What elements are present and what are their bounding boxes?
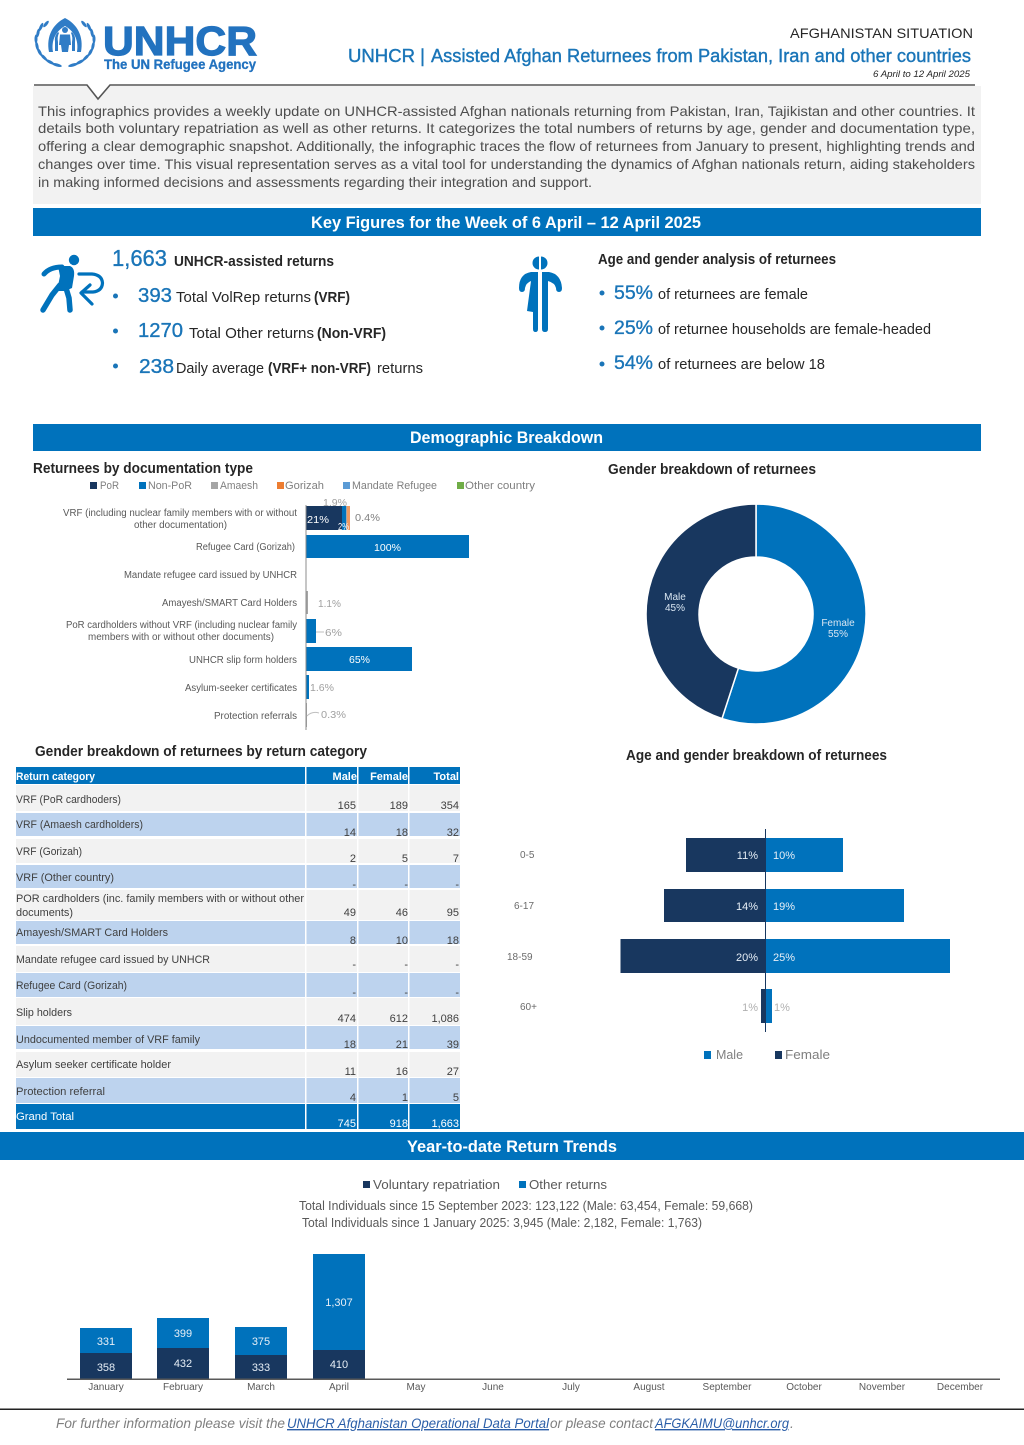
chart category labels: Amayesh/SMART Card Holders bbox=[162, 598, 297, 609]
stat: below 18 bbox=[600, 352, 825, 374]
table values: male: 8 bbox=[350, 935, 356, 947]
header: date range: 6 April to 12 April 2025 bbox=[873, 69, 971, 80]
month labels bbox=[88, 1382, 984, 1393]
table row labels: Protection referral bbox=[16, 1086, 105, 1098]
stat: female share bbox=[600, 282, 808, 304]
table row labels: documents) bbox=[16, 907, 73, 919]
table values: female: 918 bbox=[390, 1118, 408, 1130]
donut labels: Female bbox=[821, 618, 855, 629]
intro text: details both voluntary repatriation as well as other returns. It categorizes the total numbers of returns by age, gender and documentation type, bbox=[38, 120, 975, 136]
month labels: May bbox=[407, 1382, 425, 1393]
chart legend: Mandate Refugee bbox=[352, 480, 437, 492]
table row labels: VRF (Gorizah) bbox=[16, 846, 82, 858]
chart category labels: Asylum-seeker certificates bbox=[185, 683, 297, 694]
table header row bbox=[16, 771, 459, 783]
table values: total: 39 bbox=[447, 1039, 459, 1051]
month labels: October bbox=[786, 1382, 822, 1393]
table values: male: - bbox=[352, 959, 356, 971]
stat: female-headed households: of returnee households are female-headed bbox=[658, 322, 931, 338]
logo: UNHCR bbox=[34, 18, 257, 72]
heading: age and gender analysis: Age and gender analysis of returnees bbox=[598, 252, 836, 268]
section heading: year-to-date trends: Year-to-date Return Trends bbox=[407, 1137, 617, 1156]
table row labels: Refugee Card (Gorizah) bbox=[16, 980, 127, 992]
table values: male: 11 bbox=[345, 1066, 356, 1078]
table values: total: - bbox=[455, 959, 459, 971]
key figure: other returns: (Non-VRF) bbox=[317, 326, 386, 342]
stat: female-headed households: 25% bbox=[614, 317, 653, 339]
chart data labels: 1.6% bbox=[310, 682, 334, 694]
donut segment: female bbox=[722, 504, 866, 724]
table values: female bbox=[390, 800, 408, 1130]
chart category labels: members with or without other documents) bbox=[88, 632, 274, 643]
table values: male: 474 bbox=[338, 1013, 356, 1025]
chart category labels: Mandate refugee card issued by UNHCR bbox=[124, 570, 297, 581]
intro text: changes over time. This visual representation serves as a vital tool for understanding the dynamics of Afghan nationals return, aiding stakeholders bbox=[38, 156, 975, 172]
table values: female: - bbox=[404, 959, 408, 971]
table values: total: 1,086 bbox=[431, 1013, 459, 1025]
header: title: UNHCR | bbox=[348, 45, 425, 66]
icon: man and woman bbox=[519, 256, 562, 332]
pyramid age labels: 0-5 bbox=[520, 850, 535, 861]
table values: female: 16 bbox=[396, 1066, 408, 1078]
section heading: demographic breakdown bbox=[33, 424, 981, 451]
chart data labels bbox=[307, 497, 401, 721]
table values: total: 27 bbox=[447, 1066, 459, 1078]
pyramid heading: Age and gender breakdown of returnees bbox=[626, 748, 887, 764]
bar values: 399 bbox=[174, 1328, 192, 1340]
chart category labels bbox=[63, 508, 297, 722]
intro text bbox=[38, 103, 975, 190]
table values: male: 49 bbox=[344, 907, 356, 919]
table values: male: 745 bbox=[338, 1118, 356, 1130]
stat: female-headed households bbox=[600, 317, 931, 339]
table row labels: Slip holders bbox=[16, 1007, 72, 1019]
table values: female: 612 bbox=[390, 1013, 408, 1025]
trends totals text bbox=[299, 1199, 753, 1230]
bar values: 1,307 bbox=[325, 1297, 353, 1309]
pyramid data labels: 11% bbox=[737, 850, 758, 862]
chart legend: PoR bbox=[100, 480, 119, 492]
month labels: January bbox=[88, 1382, 124, 1393]
table values: total: - bbox=[455, 987, 459, 999]
table values: male: - bbox=[352, 987, 356, 999]
chart category labels: PoR cardholders without VRF (including nuclear family bbox=[66, 620, 297, 631]
table values: female: 1 bbox=[402, 1092, 408, 1104]
key figure: daily average: 238 bbox=[139, 355, 174, 378]
table header row: Total bbox=[434, 771, 459, 783]
intro text: This infographics provides a weekly update on UNHCR-assisted Afghan nationals returning from Pakistan, Iran, Tajikistan and other countries. It bbox=[38, 103, 975, 119]
key figure: VolRep: 393 bbox=[138, 284, 172, 307]
footer bbox=[56, 1415, 794, 1431]
pyramid female bars bbox=[620, 838, 766, 1023]
table row labels: Undocumented member of VRF family bbox=[16, 1034, 200, 1046]
table header row: Return category bbox=[16, 771, 96, 783]
key figure: other returns: Total Other returns bbox=[189, 326, 314, 342]
table values: total: 5 bbox=[453, 1092, 459, 1104]
month labels: March bbox=[247, 1382, 275, 1393]
bars: voluntary repatriation bbox=[80, 1348, 365, 1379]
table row labels: VRF (PoR cardhoders) bbox=[16, 794, 121, 806]
table values: female: 5 bbox=[402, 853, 408, 865]
table values: total: 95 bbox=[447, 907, 459, 919]
table backgrounds bbox=[16, 767, 460, 1129]
footer: For further information please visit the bbox=[56, 1415, 285, 1431]
pyramid data labels: 20% bbox=[736, 952, 758, 964]
table values: total bbox=[431, 800, 459, 1130]
chart heading: Returnees by documentation type bbox=[33, 461, 253, 477]
donut labels: 55% bbox=[828, 629, 848, 640]
pyramid age labels: 60+ bbox=[520, 1002, 537, 1013]
table row labels: POR cardholders (inc. family members with or without other bbox=[16, 893, 304, 905]
trends legend: Other returns bbox=[529, 1177, 607, 1192]
table values: male bbox=[338, 800, 356, 1130]
key figure: VolRep: (VRF) bbox=[314, 290, 350, 306]
chart data labels: 2% bbox=[338, 521, 349, 533]
table values: total: 1,663 bbox=[431, 1118, 459, 1130]
month labels: June bbox=[482, 1382, 504, 1393]
pyramid legend: Male bbox=[716, 1047, 743, 1062]
table values: male: 2 bbox=[350, 853, 356, 865]
bar values: 410 bbox=[330, 1359, 348, 1371]
pyramid legend: Female bbox=[785, 1047, 830, 1062]
stat: female share: of returnees are female bbox=[658, 287, 808, 303]
month labels: April bbox=[329, 1382, 349, 1393]
pyramid data labels: 19% bbox=[773, 901, 795, 913]
table values: total: 32 bbox=[447, 827, 459, 839]
key figure: VolRep bbox=[113, 284, 350, 307]
pyramid male bars bbox=[766, 838, 950, 1023]
table row labels bbox=[16, 794, 304, 1123]
key figure: daily average bbox=[113, 355, 423, 378]
key figure: daily average: Daily average bbox=[176, 361, 264, 377]
stat: female share: 55% bbox=[614, 282, 653, 304]
table row labels: Grand Total bbox=[16, 1111, 74, 1123]
trends legend bbox=[363, 1177, 607, 1192]
donut labels: 45% bbox=[665, 603, 685, 614]
table row labels: VRF (Other country) bbox=[16, 872, 114, 884]
table row labels: VRF (Amaesh cardholders) bbox=[16, 819, 143, 831]
chart data labels: 6% bbox=[325, 627, 342, 639]
table values: male: 165 bbox=[338, 800, 356, 812]
trends totals text: Total Individuals since 1 January 2025: 3,945 (Male: 2,182, Female: 1,763) bbox=[302, 1216, 702, 1230]
footer: UNHCR Afghanistan Operational Data Portal bbox=[287, 1415, 550, 1431]
logo wordmark: UNHCR bbox=[103, 18, 257, 64]
table values: female: 189 bbox=[390, 800, 408, 812]
chart: monthly returns bbox=[67, 1254, 1000, 1393]
chart data labels: 0.3% bbox=[321, 709, 346, 721]
footer: . bbox=[790, 1415, 794, 1431]
chart data labels: 100% bbox=[374, 542, 401, 554]
table values: male: 18 bbox=[344, 1039, 356, 1051]
chart category labels: UNHCR slip form holders bbox=[189, 655, 297, 666]
key figure: other returns bbox=[113, 319, 386, 342]
pyramid data labels: 1% bbox=[774, 1002, 790, 1014]
intro text: in making informed decisions and assessments regarding their integration and support. bbox=[38, 174, 592, 190]
table values: female: 10 bbox=[396, 935, 408, 947]
key figure: total returns bbox=[112, 245, 334, 271]
stat: below 18: 54% bbox=[614, 352, 653, 374]
key figure: daily average: (VRF+ non-VRF) bbox=[268, 361, 371, 377]
donut heading: Gender breakdown of returnees bbox=[608, 462, 816, 478]
footer: AFGKAIMU@unhcr.org bbox=[654, 1415, 789, 1431]
chart data labels: 0.4% bbox=[355, 512, 380, 524]
chart legend: Amaesh bbox=[220, 480, 258, 492]
key figure: total returns: 1,663 bbox=[112, 245, 167, 271]
header: title: Assisted Afghan Returnees from Pakistan, Iran and other countries bbox=[431, 45, 971, 66]
bar values: 375 bbox=[252, 1336, 270, 1348]
table header row: Female bbox=[370, 771, 408, 783]
chart category labels: other documentation) bbox=[134, 520, 227, 531]
pyramid data labels: 10% bbox=[773, 850, 795, 862]
table values: total: 354 bbox=[441, 800, 459, 812]
chart data labels: 65% bbox=[349, 654, 370, 666]
donut labels: Male bbox=[664, 592, 686, 603]
bar values: 333 bbox=[252, 1362, 270, 1374]
chart category labels: Refugee Card (Gorizah) bbox=[196, 542, 295, 553]
chart legend bbox=[90, 480, 536, 492]
table heading: Gender breakdown of returnees by return category bbox=[35, 744, 367, 760]
table values: total: 7 bbox=[453, 853, 459, 865]
pyramid data labels: 14% bbox=[736, 901, 758, 913]
bar values: 331 bbox=[97, 1336, 115, 1348]
table values: total: 18 bbox=[447, 935, 459, 947]
month labels: August bbox=[633, 1382, 665, 1393]
intro text: offering a clear demographic snapshot. Additionally, the infographic traces the flow of returnees from January to present, highlighting trends and bbox=[38, 138, 975, 154]
donut segment: male bbox=[646, 504, 756, 719]
pyramid age labels bbox=[507, 850, 537, 1013]
donut labels bbox=[664, 592, 855, 640]
stat: below 18: of returnees are below 18 bbox=[658, 357, 825, 373]
month labels: February bbox=[163, 1382, 203, 1393]
chart legend: Other country bbox=[465, 480, 536, 492]
table values: female: 21 bbox=[396, 1039, 408, 1051]
table values: female: - bbox=[404, 987, 408, 999]
chart category labels: VRF (including nuclear family members with or without bbox=[63, 508, 297, 519]
chart: gender donut bbox=[608, 462, 866, 724]
chart category labels: Protection referrals bbox=[214, 711, 297, 722]
key figure: VolRep: Total VolRep returns bbox=[176, 290, 311, 306]
chart: age and gender pyramid bbox=[507, 748, 950, 1062]
chart: returnees by documentation type bbox=[33, 461, 536, 730]
header: situation name: AFGHANISTAN SITUATION bbox=[790, 25, 973, 41]
key figure: daily average: returns bbox=[377, 361, 423, 377]
icon: laurel and sheltering hands bbox=[34, 18, 96, 68]
table: return categories bbox=[16, 767, 460, 1130]
table values: female: 18 bbox=[396, 827, 408, 839]
table values: male: 4 bbox=[350, 1092, 356, 1104]
section heading: key figures bbox=[33, 208, 981, 236]
chart bars bbox=[306, 505, 469, 730]
table values: male: - bbox=[352, 879, 356, 891]
pyramid legend bbox=[704, 1047, 830, 1062]
key figure: total returns: UNHCR-assisted returns bbox=[174, 254, 334, 270]
panel: introduction bbox=[33, 85, 981, 204]
icon: returning person bbox=[43, 255, 102, 310]
table row labels: Mandate refugee card issued by UNHCR bbox=[16, 954, 210, 966]
table header row: Male bbox=[333, 771, 357, 783]
month labels: September bbox=[703, 1382, 752, 1393]
key figure: other returns: 1270 bbox=[138, 319, 183, 342]
pyramid data labels bbox=[736, 850, 795, 1014]
table row labels: Asylum seeker certificate holder bbox=[16, 1059, 171, 1071]
table row labels: Amayesh/SMART Card Holders bbox=[16, 927, 168, 939]
table values: female: 46 bbox=[396, 907, 408, 919]
bar values: 432 bbox=[174, 1358, 192, 1370]
bar values: 358 bbox=[97, 1362, 115, 1374]
chart data labels: 21% bbox=[307, 514, 329, 526]
chart data labels: 1.1% bbox=[318, 598, 341, 610]
section heading: year-to-date trends bbox=[0, 1132, 1024, 1160]
pyramid age labels: 18-59 bbox=[507, 952, 533, 963]
month labels: November bbox=[859, 1382, 906, 1393]
logo tagline: The UN Refugee Agency bbox=[104, 57, 256, 72]
footer: or please contact bbox=[550, 1415, 654, 1431]
table values: female: - bbox=[404, 879, 408, 891]
trends legend: Voluntary repatriation bbox=[373, 1177, 500, 1192]
table values: male: 14 bbox=[344, 827, 356, 839]
chart data labels: 1.9% bbox=[323, 497, 347, 509]
month labels: December bbox=[937, 1382, 984, 1393]
pyramid data labels: 1% bbox=[742, 1002, 758, 1014]
trends totals text: Total Individuals since 15 September 2023: 123,122 (Male: 63,454, Female: 59,668) bbox=[299, 1199, 753, 1213]
bars: other returns bbox=[80, 1254, 365, 1355]
table values: total: - bbox=[455, 879, 459, 891]
pyramid age labels: 6-17 bbox=[514, 901, 534, 912]
pyramid data labels: 25% bbox=[773, 952, 795, 964]
bar values bbox=[97, 1297, 353, 1374]
section heading: key figures: Key Figures for the Week of 6 April – 12 April 2025 bbox=[311, 213, 701, 232]
chart legend: Gorizah bbox=[285, 480, 324, 492]
month labels: July bbox=[562, 1382, 580, 1393]
section heading: demographic breakdown: Demographic Breakdown bbox=[410, 428, 603, 447]
chart legend: Non-PoR bbox=[148, 480, 192, 492]
